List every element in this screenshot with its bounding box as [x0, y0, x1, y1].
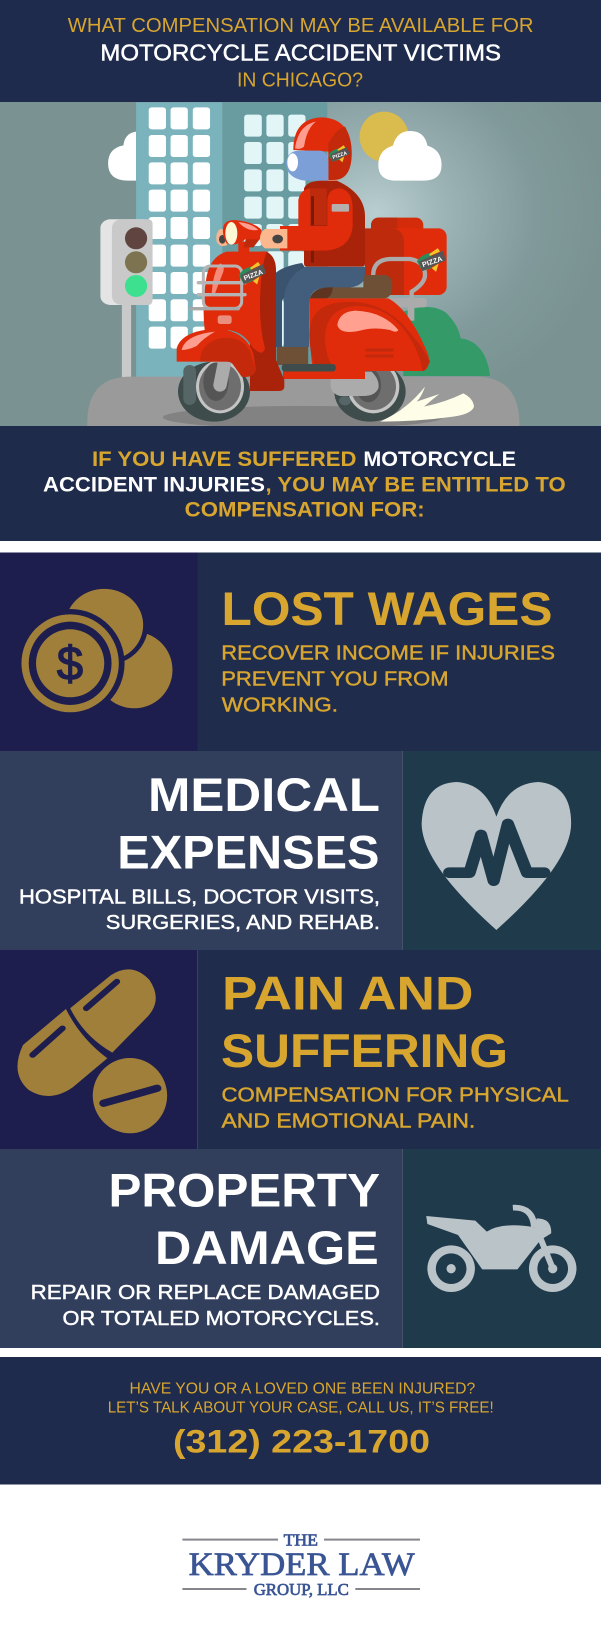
description: lost wages — [221, 642, 555, 716]
description: medical expenses — [19, 886, 380, 934]
sleeve — [280, 188, 353, 251]
vents — [367, 350, 392, 356]
cloud behind building — [108, 132, 136, 181]
heading: property damage: DAMAGE — [155, 1221, 379, 1274]
badge: shield logo — [237, 261, 269, 289]
panel: call to action — [0, 1357, 601, 1484]
shield dark strip — [250, 252, 284, 391]
icon: heart with pulse — [422, 782, 571, 930]
delivery box — [365, 218, 447, 310]
heading: medical expenses: EXPENSES — [117, 826, 380, 879]
shield patch — [218, 315, 232, 324]
sun — [360, 112, 409, 162]
icon: pills — [17, 969, 167, 1133]
badge: shield logo: PIZZA — [243, 269, 264, 282]
description: property damage: REPAIR OR REPLACE DAMAGED — [31, 1281, 380, 1304]
rear rack base — [387, 298, 427, 321]
rear body — [300, 298, 429, 378]
intro text line 2 white: ACCIDENT INJURIES — [43, 474, 265, 497]
bush — [403, 307, 490, 376]
description: lost wages: RECOVER INCOME IF INJURIES — [221, 642, 555, 665]
header line 2: MOTORCYCLE ACCIDENT VICTIMS — [100, 40, 501, 66]
heading: medical expenses — [117, 768, 380, 879]
CTA text line 2: LET’S TALK ABOUT YOUR CASE, CALL US, IT’S FREE! — [108, 1399, 494, 1416]
logo: The Kryder Law Group: KRYDER LAW — [189, 1547, 416, 1583]
badge: box logo: PIZZA — [421, 256, 444, 269]
rear body dark arc — [309, 302, 430, 371]
illustration: delivery rider on red scooter in the city — [0, 100, 601, 429]
description: property damage — [31, 1281, 380, 1330]
front rack — [191, 266, 245, 309]
shield — [204, 252, 267, 353]
cloud right — [378, 131, 442, 181]
panel: header — [0, 0, 601, 102]
scooter front shield and fender — [177, 252, 284, 391]
rider legs and boot — [270, 263, 365, 365]
header line 3: IN CHICAGO? — [237, 68, 363, 91]
road shadow — [163, 406, 443, 429]
exhaust puff — [380, 387, 474, 422]
intro text line 1 white: MOTORCYCLE — [363, 448, 516, 471]
logo: The Kryder Law Group — [182, 1531, 420, 1599]
body highlight — [337, 311, 398, 332]
badge: helmet logo — [327, 144, 351, 166]
icon: motorcycle — [426, 1208, 576, 1292]
panel: medical expenses — [0, 751, 601, 950]
building right — [222, 102, 327, 377]
shield highlight — [212, 263, 224, 293]
intro text line 3: COMPENSATION FOR: — [185, 499, 425, 522]
icon: coins: $ — [57, 636, 83, 690]
logo: The Kryder Law Group: GROUP, LLC — [254, 1580, 349, 1599]
rear body panel — [325, 306, 423, 371]
fender highlight — [182, 332, 215, 350]
building left — [136, 102, 222, 377]
near glove — [260, 229, 287, 248]
fender shade — [200, 338, 256, 377]
panel: pain and suffering — [0, 950, 601, 1149]
panel: property damage — [0, 1149, 601, 1348]
description: pain and suffering — [222, 1084, 569, 1133]
heading: property damage — [108, 1164, 380, 1274]
CTA text line 1: HAVE YOU OR A LOVED ONE BEEN INJURED? — [130, 1380, 475, 1397]
panel: lost wages — [0, 552, 601, 751]
phone number: (312) 223-1700 — [173, 1423, 430, 1459]
intro text line 2 gold: , YOU MAY BE ENTITLED TO — [266, 474, 566, 497]
handlebar, headlight and gloves — [216, 220, 287, 253]
heading: pain and suffering: PAIN AND — [222, 966, 473, 1019]
heading: medical expenses: MEDICAL — [148, 768, 380, 821]
icon: coins — [16, 587, 172, 718]
description: pain and suffering: COMPENSATION FOR PHYSICAL — [222, 1084, 569, 1107]
intro text line 1 gold: IF YOU HAVE SUFFERED — [92, 448, 356, 471]
wheel cover — [331, 372, 379, 396]
city background — [0, 100, 601, 429]
reflector patch — [332, 204, 349, 212]
description: pain and suffering: AND EMOTIONAL PAIN. — [222, 1110, 475, 1133]
description: property damage: OR TOTALED MOTORCYCLES. — [62, 1307, 380, 1330]
fender — [177, 329, 256, 377]
description: medical expenses: SURGERIES, AND REHAB. — [106, 911, 380, 934]
bush and rear wheel — [334, 298, 490, 422]
front wheel — [178, 360, 250, 422]
rider torso — [280, 177, 365, 267]
badge: helmet logo: PIZZA — [332, 150, 348, 161]
description: lost wages: PREVENT YOU FROM — [221, 668, 448, 691]
heading: pain and suffering — [221, 966, 508, 1077]
header line 1: WHAT COMPENSATION MAY BE AVAILABLE FOR — [68, 14, 534, 37]
rear wheel — [334, 360, 406, 422]
badge: box logo — [415, 247, 448, 276]
scooter floor — [282, 364, 365, 379]
heading: lost wages: LOST WAGES — [222, 582, 552, 635]
description: medical expenses: HOSPITAL BILLS, DOCTOR VISITS, — [19, 886, 380, 909]
helmet — [286, 117, 352, 181]
heading: pain and suffering: SUFFERING — [221, 1024, 508, 1077]
scooter rear body and seat — [300, 275, 430, 396]
traffic light — [100, 219, 153, 377]
description: lost wages: WORKING. — [222, 693, 338, 716]
heading: property damage: PROPERTY — [108, 1164, 380, 1217]
road — [87, 377, 519, 428]
box rail — [373, 259, 425, 310]
panel: intro band — [0, 426, 601, 541]
logo: The Kryder Law Group: THE — [284, 1531, 318, 1550]
seat — [310, 275, 392, 298]
